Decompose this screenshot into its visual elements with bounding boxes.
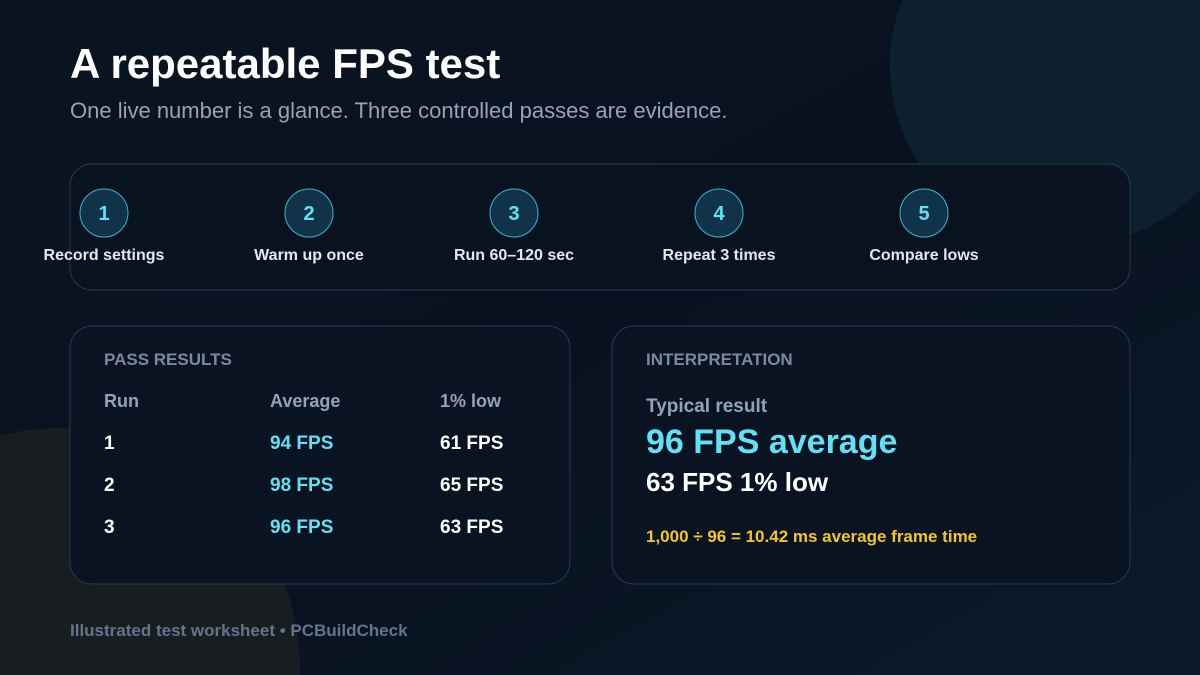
- step 5: [869, 189, 979, 264]
- subtitle: One live number is a glance. Three controlled passes are evidence.: [70, 98, 728, 123]
- step 1: 1: [98, 203, 110, 225]
- step 1: Record settings: [44, 247, 165, 264]
- step 3: [454, 189, 574, 264]
- table header: 1% low: [440, 391, 502, 411]
- footer: Illustrated test worksheet • PCBuildCheck: [70, 621, 408, 640]
- step 3: Run 60–120 sec: [454, 247, 574, 264]
- row: run 2: 98 FPS: [270, 475, 333, 496]
- step 5: Compare lows: [869, 247, 979, 264]
- row: run 2: 65 FPS: [440, 475, 503, 496]
- row: run 3: 3: [104, 517, 115, 538]
- row: run 1: 94 FPS: [270, 433, 333, 454]
- row: run 1: [104, 433, 503, 454]
- table header: Run: [104, 391, 139, 411]
- step 5: 5: [918, 203, 930, 225]
- step 1: [44, 189, 165, 264]
- row: run 3: 96 FPS: [270, 517, 333, 538]
- row: run 1: 1: [104, 433, 115, 454]
- title: A repeatable FPS test: [70, 40, 500, 87]
- low result: 63 FPS 1% low: [646, 467, 829, 497]
- panel: test steps: [44, 164, 1130, 290]
- row: run 3: [104, 517, 503, 538]
- step 2: Warm up once: [254, 247, 364, 264]
- panel: interpretation: [612, 326, 1130, 584]
- frame time formula: 1,000 ÷ 96 = 10.42 ms average frame time: [646, 527, 977, 546]
- step 2: [254, 189, 364, 264]
- step 4: [663, 189, 776, 264]
- row: run 2: [104, 475, 503, 496]
- panel: pass results: [70, 326, 570, 584]
- average result: 96 FPS average: [646, 423, 897, 461]
- row: run 3: 63 FPS: [440, 517, 503, 538]
- row: run 1: 61 FPS: [440, 433, 503, 454]
- table header: Average: [270, 391, 340, 411]
- interpretation heading: INTERPRETATION: [646, 350, 793, 369]
- row: run 2: 2: [104, 475, 115, 496]
- step 3: 3: [508, 203, 520, 225]
- typical result label: Typical result: [646, 396, 768, 417]
- step 2: 2: [303, 203, 315, 225]
- table header: [104, 391, 502, 411]
- pass results heading: PASS RESULTS: [104, 350, 232, 369]
- step 4: Repeat 3 times: [663, 247, 776, 264]
- step 4: 4: [713, 203, 725, 225]
